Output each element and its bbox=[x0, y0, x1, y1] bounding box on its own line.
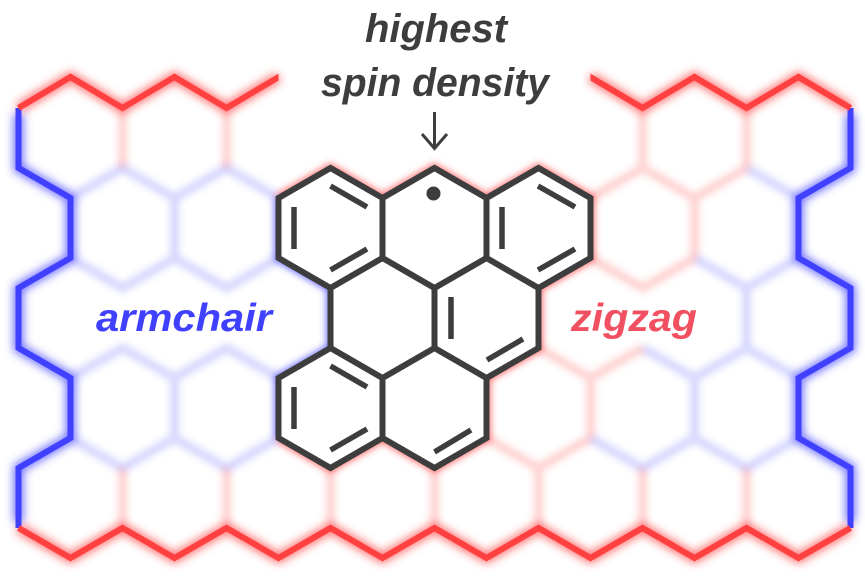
faint blue armchair-influenced bonds bbox=[70, 168, 798, 468]
molecule: central polycyclic fragment bbox=[278, 168, 590, 468]
red top-left zigzag edge bbox=[18, 75, 282, 108]
red bottom zigzag edge bbox=[18, 528, 850, 558]
heading: highest spin density: highest bbox=[365, 7, 509, 51]
label: zigzag: zigzag bbox=[570, 297, 697, 340]
radical dot bbox=[426, 186, 440, 200]
heading: highest spin density: spin density bbox=[321, 61, 551, 105]
faint red zigzag-influenced bonds bbox=[122, 108, 746, 528]
molecule interior bbox=[278, 168, 590, 468]
label: armchair: armchair bbox=[96, 297, 274, 340]
heading: highest spin density bbox=[321, 7, 551, 105]
panel: faint interior lattice bbox=[70, 108, 798, 528]
red top-right zigzag edge bbox=[587, 75, 850, 108]
red zigzag edge glow bbox=[18, 77, 850, 558]
blue right armchair edge bbox=[798, 108, 850, 528]
arrow to highest spin density site bbox=[422, 112, 447, 148]
molecule glow blue bbox=[278, 198, 330, 438]
molecule bonds bbox=[278, 168, 590, 468]
molecule glow red bbox=[278, 168, 590, 468]
blue armchair edge glow bbox=[18, 114, 850, 522]
molecule double bonds bbox=[294, 186, 575, 452]
blue left armchair edge bbox=[18, 108, 70, 528]
